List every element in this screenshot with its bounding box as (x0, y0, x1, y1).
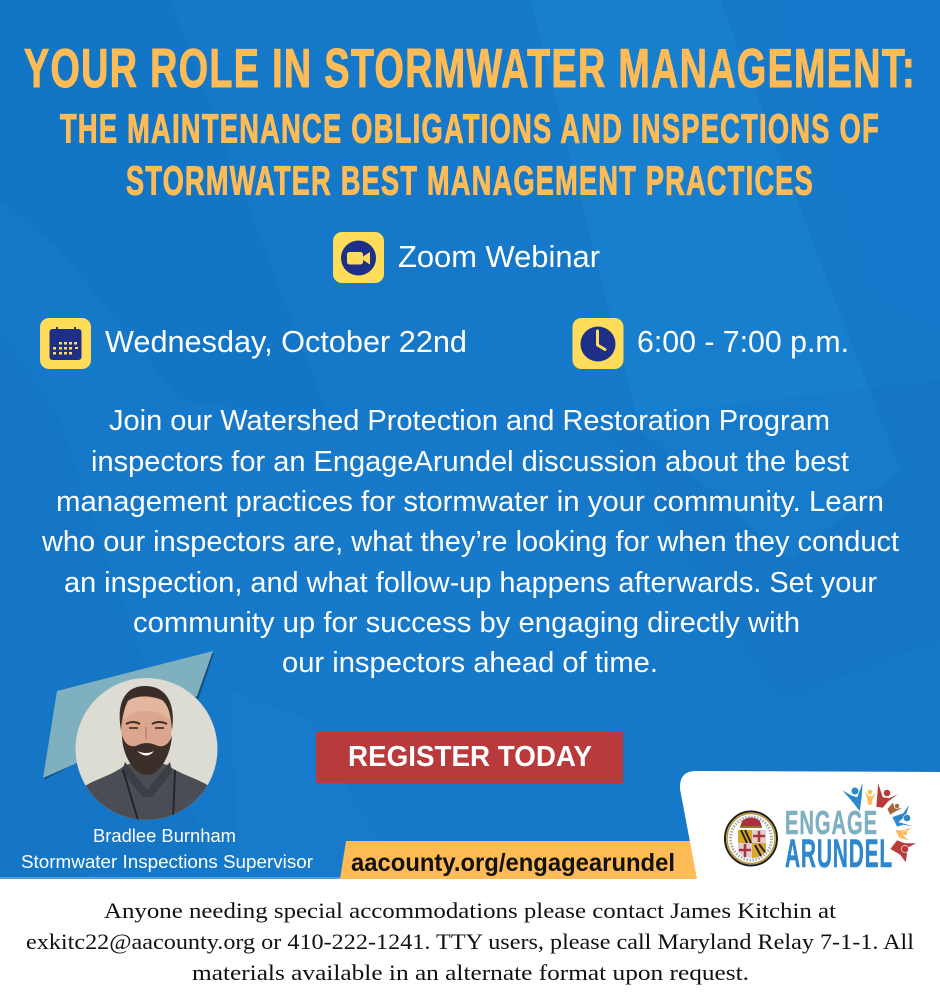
speaker name and title (21, 826, 313, 872)
zoom webinar label: Zoom Webinar (398, 239, 600, 274)
beard (122, 735, 172, 775)
register button: REGISTER TODAY (348, 741, 592, 773)
hair (120, 686, 173, 730)
accessibility notice: Anyone needing special accommodations please contact James Kitchin at (104, 898, 836, 923)
description text: Join our Watershed Protection and Restoration Program (109, 405, 830, 437)
icon: clock (572, 318, 624, 369)
logo panel (680, 771, 940, 879)
register button (316, 732, 623, 783)
accessibility notice: materials available in an alternate format upon request. (192, 960, 749, 985)
county seal (725, 812, 777, 866)
description text: management practices for stormwater in your community. Learn (56, 486, 884, 518)
accessibility notice (26, 898, 914, 985)
accessibility notice: exkitc22@aacounty.org or 410-222-1241. TTY users, please call Maryland Relay 7-1-1. All (26, 929, 914, 954)
speaker name and title: Bradlee Burnham (93, 826, 236, 846)
engage arundel wordmark: ENGAGE (785, 804, 878, 841)
shirt (86, 764, 208, 820)
icon: zoom camera (333, 232, 384, 283)
face (120, 696, 172, 746)
description text (41, 405, 899, 679)
icon: calendar (40, 318, 91, 369)
url banner: aacounty.org/engagearundel (351, 849, 675, 877)
description text: an inspection, and what follow-up happens afterwards. Set your (64, 567, 878, 599)
date: Wednesday, October 22nd (105, 324, 467, 359)
description text: inspectors for an EngageArundel discussion about the best (91, 446, 849, 478)
description text: who our inspectors are, what they’re looking for when they conduct (41, 526, 899, 558)
description text: our inspectors ahead of time. (282, 647, 658, 679)
speaker photo (75, 678, 218, 825)
decorative backing shape (43, 651, 214, 780)
title (24, 37, 916, 204)
description text: community up for success by engaging directly with (133, 607, 800, 639)
smile (137, 751, 154, 756)
brows and eyes (126, 722, 167, 724)
speaker name and title: Stormwater Inspections Supervisor (21, 852, 313, 872)
time: 6:00 - 7:00 p.m. (637, 324, 849, 359)
people figures arc (841, 781, 917, 863)
engage arundel wordmark (785, 804, 893, 876)
